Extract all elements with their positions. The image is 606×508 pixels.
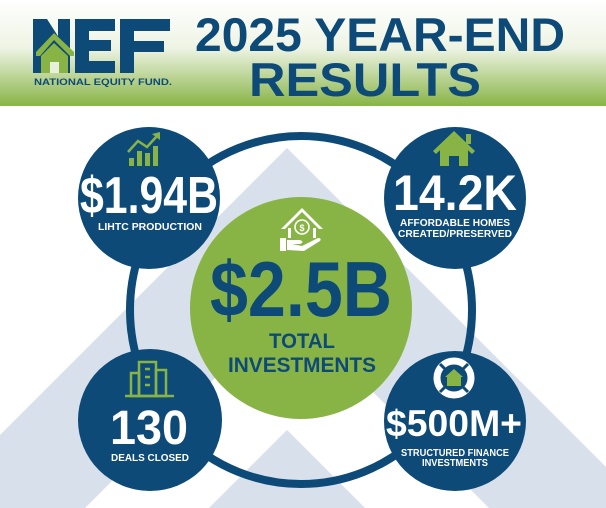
- panel: total investments: INVESTMENTS: [228, 354, 376, 377]
- connecting ring: [130, 136, 472, 484]
- icon: hand with house: $: [299, 223, 305, 233]
- panel: structured finance: STRUCTURED FINANCE: [401, 448, 509, 459]
- background chevrons: [0, 148, 606, 508]
- panel: structured finance: INVESTMENTS: [422, 458, 488, 469]
- icon: buildings: [125, 362, 174, 396]
- panel: deals closed: [78, 349, 222, 491]
- panel: affordable homes: CREATED/PRESERVED: [398, 228, 512, 240]
- panel: LIHTC production: $1.94B: [80, 167, 218, 225]
- icon: lifebuoy with house: [437, 361, 471, 395]
- panel: LIHTC production: [78, 127, 220, 269]
- panel: total investments: [190, 197, 412, 419]
- panel: deals closed: DEALS CLOSED: [111, 452, 189, 464]
- icon: hand with house: [280, 208, 323, 251]
- panel: structured finance: [384, 351, 526, 491]
- panel: affordable homes: [384, 127, 526, 269]
- panel: total investments: TOTAL: [269, 330, 335, 353]
- logo: NEF: [33, 19, 172, 87]
- panel: total investments: $2.5B: [210, 245, 392, 333]
- panel: structured finance: $500M+: [386, 403, 522, 444]
- panel: affordable homes: AFFORDABLE HOMES: [400, 217, 510, 229]
- title: RESULTS: [249, 53, 481, 106]
- title: 2025 YEAR-END: [195, 8, 565, 61]
- icon: growth chart: [128, 132, 160, 166]
- title: [195, 8, 565, 106]
- logo: NEF: NATIONAL EQUITY FUND.: [34, 77, 172, 87]
- panel: affordable homes: 14.2K: [393, 165, 517, 221]
- header band: [0, 0, 606, 106]
- icon: house: [433, 131, 475, 166]
- panel: deals closed: 130: [110, 402, 188, 455]
- panel: LIHTC production: LIHTC PRODUCTION: [98, 221, 202, 233]
